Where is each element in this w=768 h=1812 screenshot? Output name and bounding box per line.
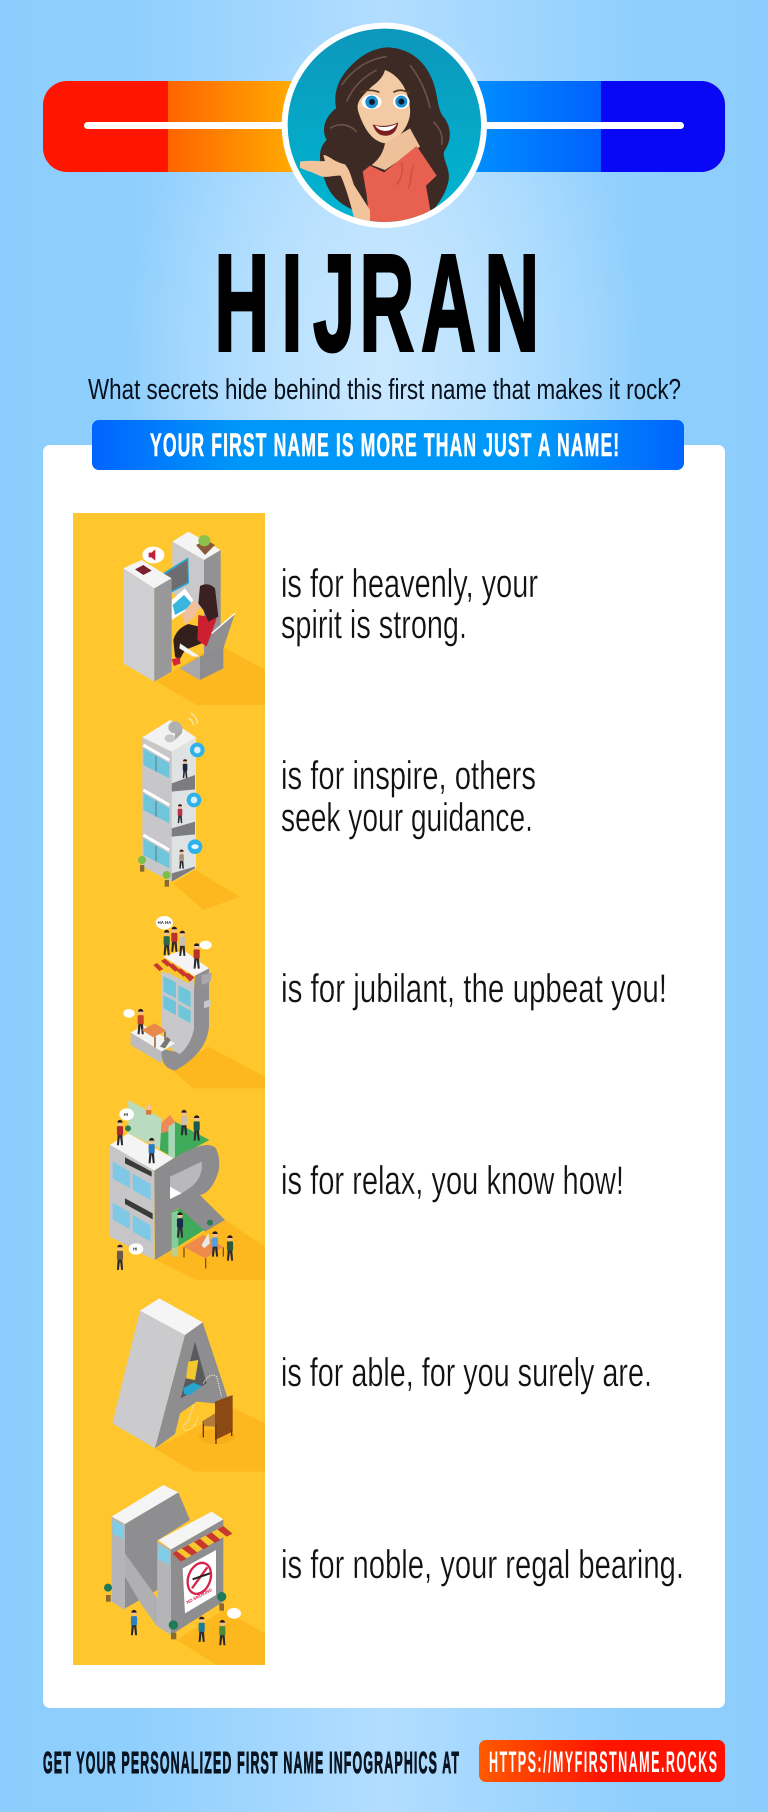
avatar portrait [282, 23, 487, 228]
illustration: letter N [104, 1485, 265, 1665]
text: letter I meaning: is for inspire, others [281, 754, 536, 798]
banner [92, 420, 684, 470]
white content card [43, 445, 725, 1708]
text: letter I meaning: seek your guidance. [281, 796, 533, 840]
illustration: letter J [123, 916, 265, 1088]
illustration: letter H [123, 532, 265, 705]
illustration: letter R: HI [133, 1247, 137, 1252]
footer url button: HTTPS://MYFIRSTNAME.ROCKS [489, 1745, 717, 1779]
illustration: letter R: HI [124, 1112, 128, 1117]
illustration: letter R [110, 1100, 265, 1280]
illustration: letter A [112, 1298, 265, 1472]
text: letter H meaning: is for heavenly, your [281, 562, 538, 606]
illustration: letter N: NO SMOKING [185, 1587, 213, 1605]
panel: yellow letters column [73, 513, 265, 1665]
text: letter R meaning: is for relax, you know how! [281, 1159, 624, 1203]
footer call to action: GET YOUR PERSONALIZED FIRST NAME INFOGRAPHICS AT [43, 1747, 459, 1781]
text: letter I meaning [281, 754, 536, 840]
text: letter H meaning [281, 562, 538, 647]
title: HIJRAN [214, 225, 539, 380]
illustration: letter I [138, 713, 240, 910]
text: letter H meaning: spirit is strong. [281, 603, 467, 647]
illustration: letter J: HA HA [158, 920, 172, 925]
header colour bar [43, 81, 725, 172]
banner: YOUR FIRST NAME IS MORE THAN JUST A NAME! [150, 429, 619, 463]
